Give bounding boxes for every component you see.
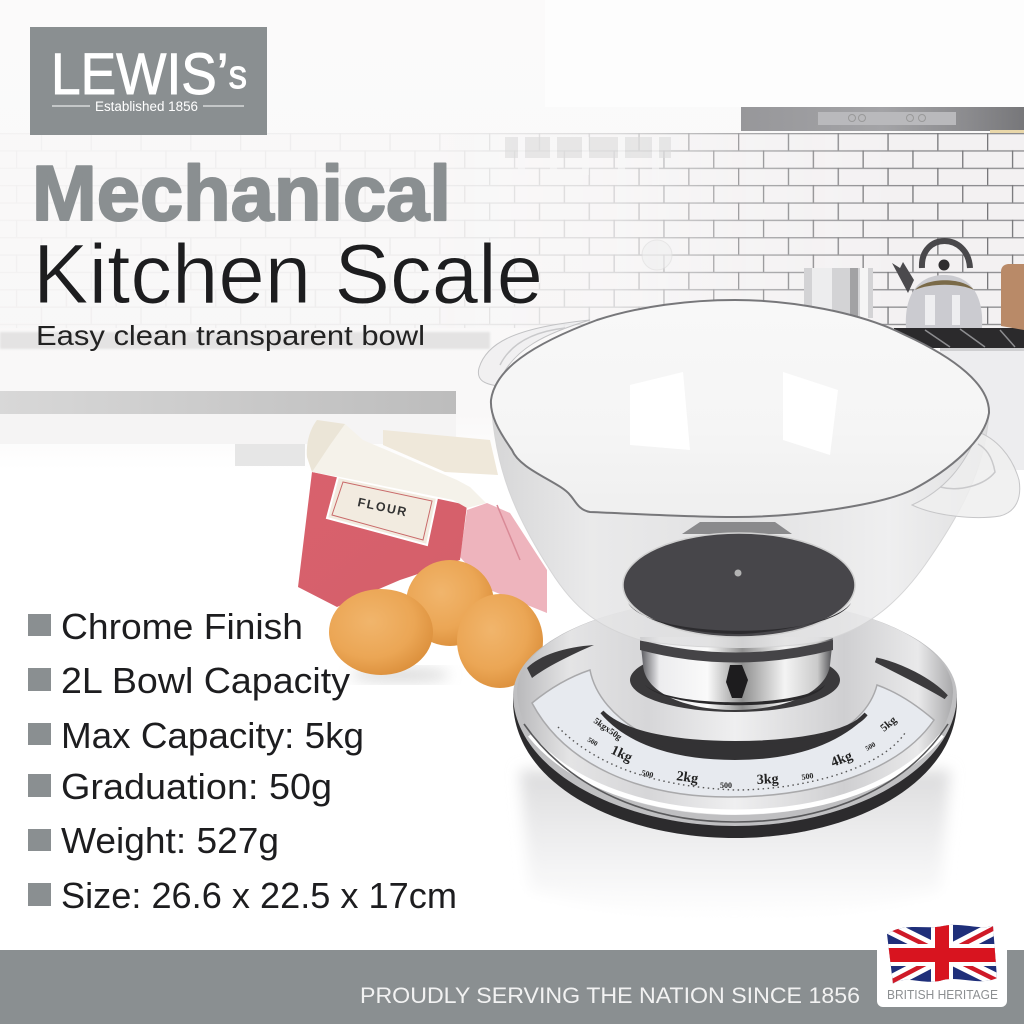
scale tick arc (558, 727, 905, 790)
faint counter shelf strip (0, 332, 490, 349)
scale numerals: 1kg (608, 743, 634, 766)
wooden board (1001, 264, 1024, 330)
scale numerals: 500 (864, 740, 878, 753)
icon: union flag (887, 924, 997, 984)
flour bag (298, 420, 547, 613)
scale numerals: 500 (641, 768, 654, 780)
left handle (478, 320, 590, 386)
chrome neck (630, 637, 840, 712)
chrome base (513, 598, 957, 838)
cream back of bag (383, 430, 498, 475)
pink side of bag (460, 503, 547, 613)
kitchen background photo (0, 107, 1024, 470)
footer bar: PROUDLY SERVING THE NATION SINCE 1856 (360, 983, 860, 1008)
marble counter left (0, 391, 456, 414)
red bag front (298, 472, 467, 607)
brick wall (0, 133, 1024, 328)
kettle (892, 241, 982, 328)
bowl rim interior (491, 300, 989, 517)
knife rack (505, 137, 672, 270)
scale numerals (586, 714, 899, 790)
feature: graduation: Graduation: 50g (61, 766, 332, 807)
feature list (28, 606, 457, 916)
scale numerals: 2kg (675, 769, 699, 787)
feature: max capacity: Max Capacity: 5kg (61, 715, 364, 756)
eggs (329, 560, 543, 688)
british heritage badge (877, 920, 1007, 1007)
dark inner band (602, 712, 866, 758)
scale numerals: 4kg (829, 749, 855, 771)
bowl highlights (630, 372, 838, 455)
established line: Established 1856 (95, 99, 198, 114)
wordmark: LEWIS’ (51, 42, 244, 107)
british heritage badge: BRITISH HERITAGE (887, 987, 998, 1002)
logo (30, 27, 267, 135)
paper label (327, 477, 437, 545)
scale numerals: 500 (586, 736, 600, 748)
subtitle: Easy clean transparent bowl (36, 320, 425, 351)
weighing platform disc (623, 522, 855, 637)
dial window (532, 670, 934, 797)
scale numerals: 3kg (756, 772, 779, 788)
feature: bowl capacity: 2L Bowl Capacity (61, 660, 350, 701)
dark reflections (527, 645, 594, 678)
paper label: FLOUR (356, 495, 409, 520)
wordmark: s (229, 53, 247, 97)
title: Kitchen Scale: Kitchen Scale (33, 227, 543, 321)
scale numerals: 5kgx50g (592, 715, 624, 742)
feature: weight: Weight: 527g (61, 820, 279, 861)
title: Mechanical: Mechanical (32, 149, 451, 237)
feature: size: Size: 26.6 x 22.5 x 17cm (61, 875, 457, 916)
scale numerals: 500 (720, 781, 732, 790)
range hood (741, 107, 1024, 133)
folded top of bag (307, 420, 486, 508)
right lower cabinet (940, 348, 1024, 470)
upper cabinets (545, 0, 1024, 107)
kitchen scale (478, 300, 1020, 838)
footer bar (0, 950, 1024, 1024)
right handle (912, 432, 1020, 518)
dark marble counter right (894, 328, 1024, 348)
scale numerals: 500 (801, 771, 814, 782)
scale numerals: 5kg (878, 714, 899, 734)
scale reflection (520, 770, 950, 918)
clear bowl body (491, 400, 989, 648)
feature: chrome finish: Chrome Finish (61, 606, 303, 647)
stock pot (804, 268, 873, 318)
